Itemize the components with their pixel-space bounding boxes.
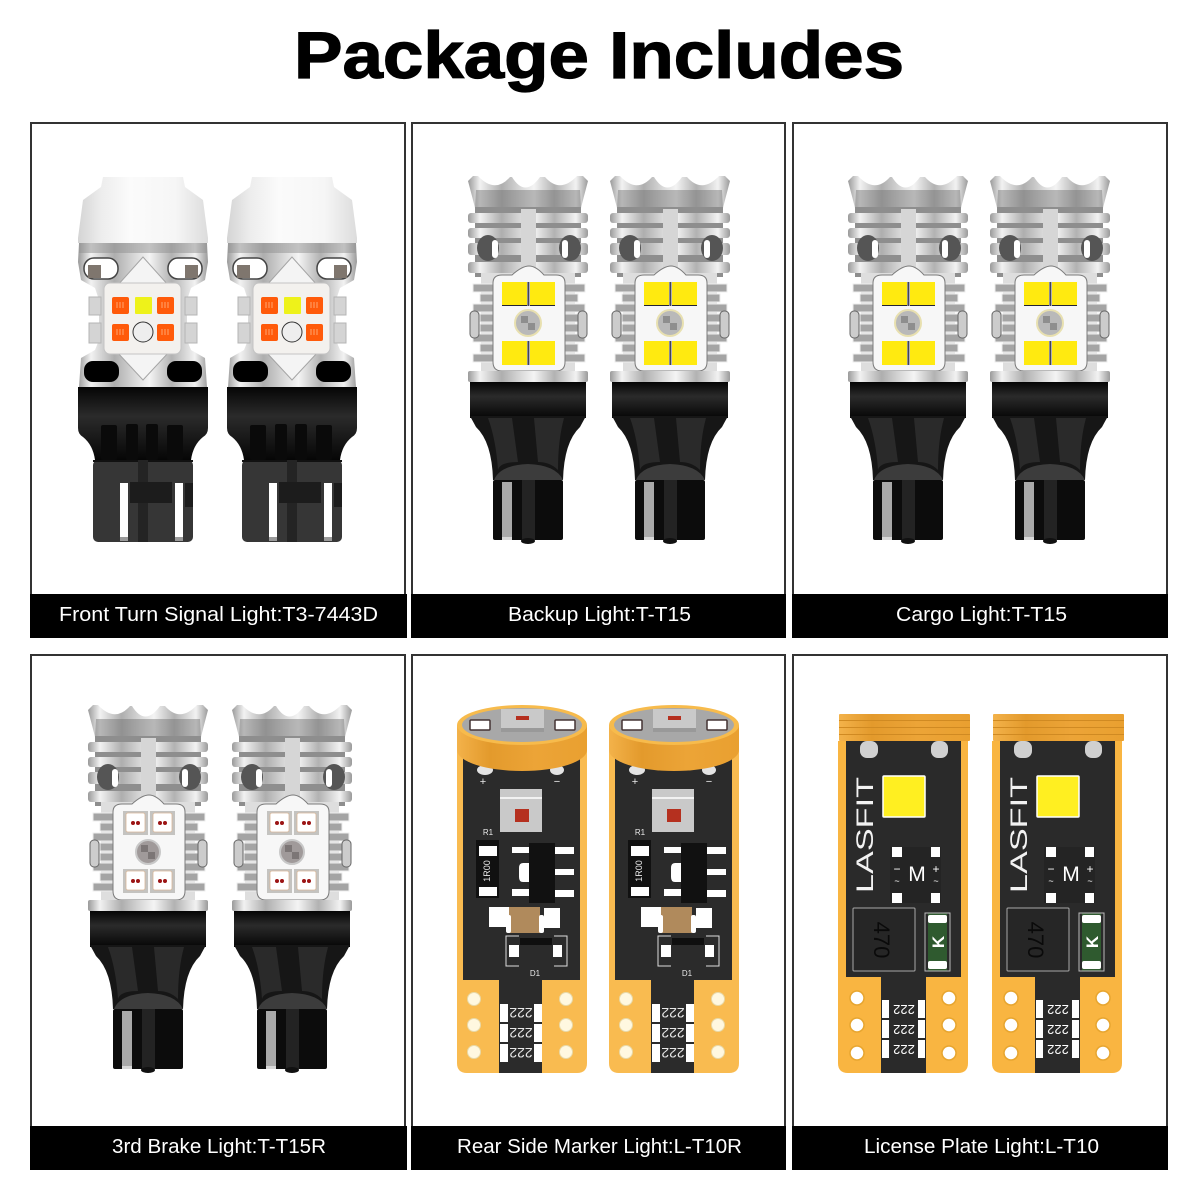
- bulb pair: L-T10: 222: [1047, 1002, 1069, 1017]
- bulb pair: L-T10: LASFIT: [852, 777, 879, 893]
- bulb pair: L-T10: ~: [933, 876, 939, 886]
- title: Package Includes: [294, 18, 904, 92]
- bulb pair: L-T10R: D1: [682, 969, 693, 978]
- bulb pair: L-T10: 222: [893, 1002, 915, 1017]
- bulb pair: L-T10: ~: [1087, 876, 1093, 886]
- bulb pair: L-T10R: 1R00: [634, 860, 644, 882]
- bulb pair: L-T10: 222: [893, 1022, 915, 1037]
- bulb pair: L-T10: −: [893, 862, 901, 876]
- bulb pair: L-T10: +: [932, 862, 940, 876]
- panel: cargo light: [792, 123, 1168, 638]
- bulb pair: T-T15 cargo: [848, 176, 1110, 544]
- bulb pair: L-T10: 470: [869, 922, 894, 958]
- bulb pair: T-T15R: [88, 705, 352, 1073]
- bulb pair: L-T10: 222: [1047, 1042, 1069, 1057]
- bulb pair: L-T10: 222: [1047, 1022, 1069, 1037]
- bulb pair: L-T10: M: [1062, 863, 1080, 886]
- bulb pair: L-T10R: +: [480, 776, 486, 788]
- label: backup light: Backup Light:T-T15: [508, 604, 691, 626]
- bulb pair: L-T10R: R1: [483, 828, 494, 837]
- panel: rear side marker light: [411, 655, 786, 1170]
- bulb pair: L-T10R: 222: [509, 1005, 533, 1021]
- bulb pair: L-T10: 222: [893, 1042, 915, 1057]
- bulb pair: L-T10: −: [1047, 862, 1055, 876]
- label: 3rd brake light: [30, 1126, 407, 1170]
- bulb pair: L-T10R: 222: [509, 1045, 533, 1061]
- bulb pair: L-T10: LASFIT: [1006, 777, 1033, 893]
- label: backup light: [411, 594, 786, 638]
- label: front turn signal: Front Turn Signal Light:T3-7443D: [59, 604, 378, 626]
- bulb pair: L-T10R: 222: [661, 1045, 685, 1061]
- bulb pair: L-T10R: 222: [509, 1025, 533, 1041]
- bulb pair: L-T10: K: [1083, 935, 1102, 948]
- bulb pair: L-T10R: [457, 705, 739, 1073]
- label: license plate: [792, 1126, 1168, 1170]
- bulb pair: T-T15 backup: [468, 176, 730, 544]
- panel: 3rd brake light: [30, 655, 407, 1170]
- label: cargo light: [792, 594, 1168, 638]
- label: cargo light: Cargo Light:T-T15: [896, 604, 1067, 626]
- bulb pair: L-T10: K: [929, 935, 948, 948]
- bulb pair: L-T10: 470: [1023, 922, 1048, 958]
- bulb pair: L-T10R: −: [706, 776, 712, 788]
- panel: license plate light: [792, 655, 1168, 1170]
- bulb pair: L-T10R: 222: [661, 1025, 685, 1041]
- bulb pair: L-T10R: +: [632, 776, 638, 788]
- bulb pair: L-T10: M: [908, 863, 926, 886]
- bulb pair: L-T10: ~: [894, 876, 900, 886]
- bulb pair: L-T10R: −: [554, 776, 560, 788]
- bulb pair: L-T10: +: [1086, 862, 1094, 876]
- bulb pair: L-T10: [838, 714, 1124, 1073]
- label: rear side marker: [411, 1126, 786, 1170]
- panel: front turn signal light: [30, 123, 407, 638]
- bulb pair: L-T10R: 1R00: [482, 860, 492, 882]
- bulb pair: L-T10R: D1: [530, 969, 541, 978]
- label: license plate: License Plate Light:L-T10: [864, 1136, 1099, 1158]
- bulb pair: L-T10R: 222: [661, 1005, 685, 1021]
- label: rear side marker: Rear Side Marker Light:L-T10R: [457, 1136, 742, 1158]
- bulb pair: T3-7443D: [78, 177, 357, 542]
- label: 3rd brake light: 3rd Brake Light:T-T15R: [112, 1136, 326, 1158]
- panel: backup light: [411, 123, 786, 638]
- bulb pair: L-T10: ~: [1048, 876, 1054, 886]
- label: front turn signal: [30, 594, 407, 638]
- bulb pair: L-T10R: R1: [635, 828, 646, 837]
